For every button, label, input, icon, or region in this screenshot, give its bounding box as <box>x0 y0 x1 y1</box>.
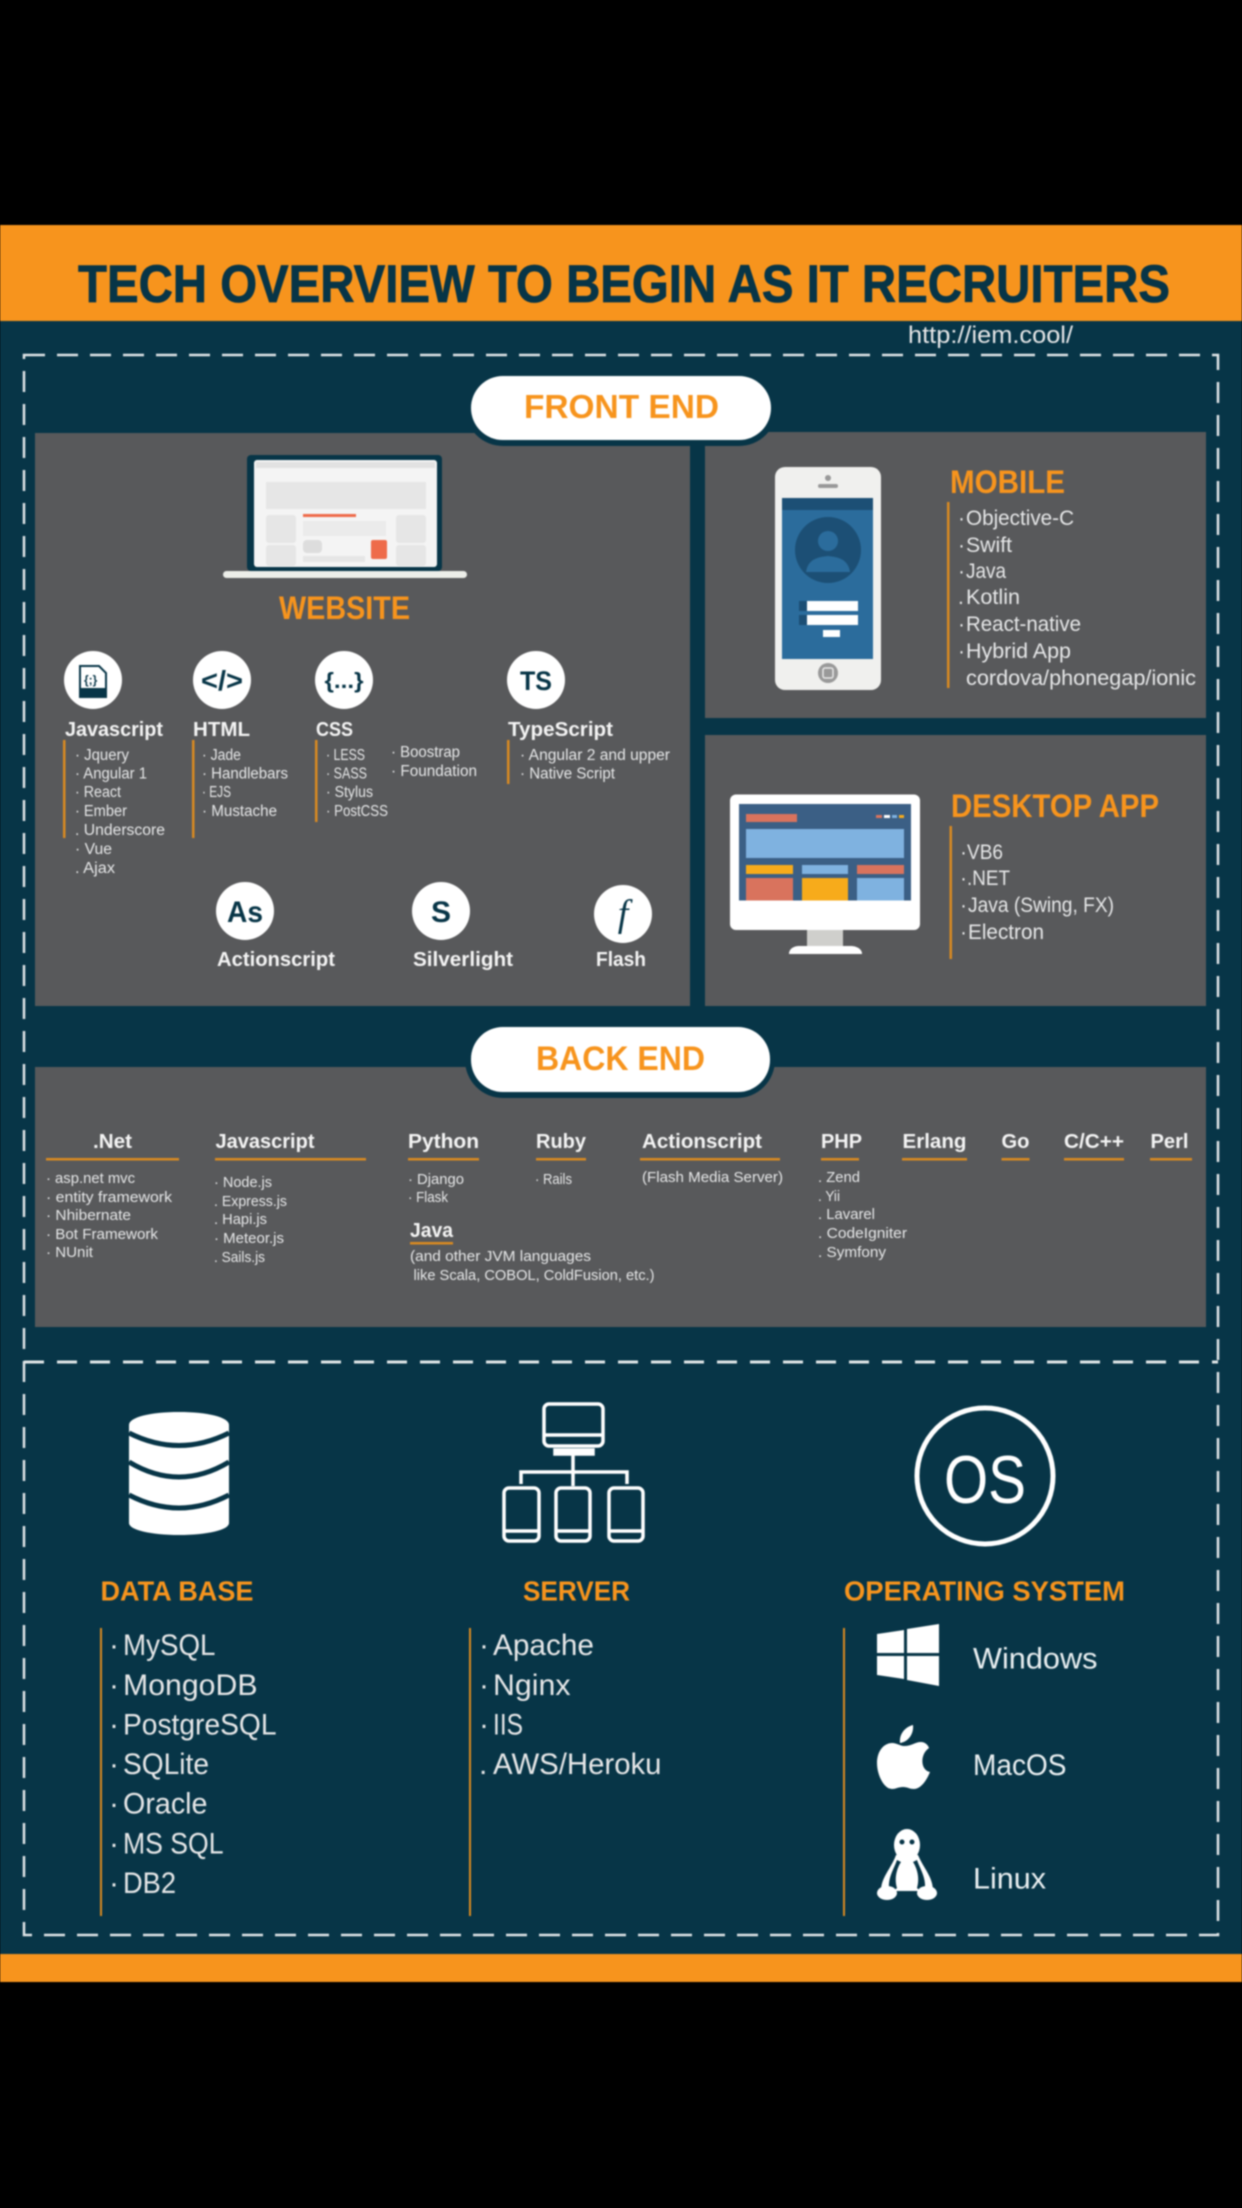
list: css: · PostCSS <box>326 803 388 820</box>
icon: windows <box>877 1624 939 1686</box>
column: perl: Perl <box>1150 1131 1188 1153</box>
list: databases: · <box>109 1629 119 1662</box>
pill heading: front end: FRONT END <box>524 388 719 425</box>
column: python and java: like Scala, COBOL, ColdFusion, etc.) <box>414 1267 654 1284</box>
label: html: HTML <box>193 719 250 741</box>
list: mobile: · <box>958 560 965 583</box>
column: .net: · Bot Framework <box>46 1226 158 1243</box>
heading: data base: DATA BASE <box>100 1576 254 1606</box>
list: databases: MySQL <box>123 1629 216 1662</box>
list: mobile: Hybrid App <box>966 640 1071 663</box>
icon: html tag: </> <box>201 665 243 696</box>
list: typescript: · Native Script <box>520 766 616 782</box>
icon: os circle <box>917 1408 1053 1544</box>
icon: database cylinder <box>129 1412 229 1535</box>
list: mobile: cordova/phonegap/ionic <box>966 667 1196 690</box>
column: .net: · asp.net mvc <box>46 1170 135 1187</box>
list: servers: Apache <box>493 1629 594 1662</box>
html group <box>192 651 288 838</box>
list: desktop app: · <box>960 894 967 917</box>
list: databases: · <box>109 1748 119 1781</box>
column: python and java: Python <box>408 1131 479 1153</box>
list: servers: IIS <box>493 1708 523 1742</box>
list: desktop app: · <box>960 921 967 944</box>
list: html: · Handlebars <box>202 766 288 782</box>
heading: mobile: MOBILE <box>950 464 1065 500</box>
list: databases: · <box>109 1788 119 1820</box>
pill heading: back end <box>465 1021 775 1098</box>
column: javascript: . Express.js <box>214 1193 287 1210</box>
list: html: · Jade <box>202 747 241 764</box>
column: python and java: (and other JVM languages <box>410 1248 591 1265</box>
list: mobile: Swift <box>966 534 1012 557</box>
silverlight group: S <box>431 896 451 929</box>
flash group <box>594 885 652 971</box>
column: actionscript <box>640 1131 783 1186</box>
column: .net: · NUnit <box>46 1244 94 1261</box>
list: typescript <box>520 747 670 782</box>
icon: css braces <box>315 651 373 709</box>
flash group: Flash <box>596 949 646 971</box>
label: css: CSS <box>316 719 353 741</box>
column: actionscript: (Flash Media Server) <box>642 1169 783 1186</box>
source url: http://iem.cool/ <box>908 322 1073 349</box>
flash group: f <box>618 893 633 935</box>
list: databases: SQLite <box>123 1748 209 1781</box>
list: servers: · <box>479 1629 489 1662</box>
list: databases: · <box>109 1828 119 1860</box>
column: ruby: Ruby <box>536 1131 587 1153</box>
column: python and java: Java <box>410 1220 454 1242</box>
column: php <box>818 1131 907 1261</box>
panel: desktop app <box>705 735 1206 1006</box>
list: mobile: · <box>958 640 965 663</box>
column: php: . Lavarel <box>818 1206 875 1223</box>
column: javascript: Javascript <box>216 1131 315 1153</box>
section: operating system <box>843 1408 1125 1916</box>
section: data base <box>100 1412 276 1916</box>
column: javascript: . Sails.js <box>214 1249 265 1266</box>
icon: linux penguin <box>877 1829 937 1900</box>
list: mobile: · <box>958 534 965 557</box>
list: servers: AWS/Heroku <box>493 1748 662 1781</box>
label: typescript: TypeScript <box>508 719 613 741</box>
pill heading: front end <box>465 370 777 446</box>
list: mobile: · <box>958 507 965 530</box>
javascript group <box>63 651 165 877</box>
list: javascript: . Ajax <box>75 860 115 877</box>
actionscript group: Actionscript <box>217 949 335 971</box>
list: servers <box>479 1629 662 1781</box>
column: python and java <box>408 1131 654 1284</box>
list: desktop app: VB6 <box>967 841 1003 864</box>
column: python and java: · Flask <box>408 1189 448 1206</box>
heading: server: SERVER <box>523 1576 630 1606</box>
column: python and java: · Django <box>408 1171 464 1188</box>
list: servers: Nginx <box>493 1669 570 1702</box>
icon: css braces: {...} <box>324 668 364 693</box>
css group <box>315 651 477 822</box>
list: mobile: Kotlin <box>966 586 1020 609</box>
icon: laptop <box>223 455 467 578</box>
header banner <box>0 225 1242 321</box>
column: .net: · Nhibernate <box>46 1207 131 1224</box>
list: javascript: · Vue <box>75 841 112 858</box>
list: mobile: Java <box>966 560 1006 583</box>
list: databases: DB2 <box>123 1867 176 1900</box>
list: desktop app: · <box>960 867 967 890</box>
column: javascript: . Hapi.js <box>214 1211 267 1228</box>
column: javascript: · Meteor.js <box>214 1230 284 1247</box>
column: c/c++: C/C++ <box>1064 1131 1124 1153</box>
list: servers: · <box>479 1708 489 1742</box>
dashed section divider <box>24 1360 1218 1364</box>
column: php: . CodeIgniter <box>818 1225 907 1242</box>
list: mobile: React-native <box>966 613 1081 636</box>
list: desktop app: Electron <box>968 921 1044 944</box>
heading: desktop app: DESKTOP APP <box>951 788 1159 824</box>
column: php: . Yii <box>818 1188 840 1205</box>
column: go: Go <box>1002 1131 1030 1153</box>
icon: server network <box>504 1404 643 1541</box>
list: databases: Oracle <box>123 1788 208 1820</box>
label: windows: Windows <box>973 1642 1098 1676</box>
icon: javascript file <box>64 651 122 709</box>
icon: typescript: TS <box>520 666 552 696</box>
silverlight group <box>412 882 513 971</box>
silverlight group: Silverlight <box>413 949 513 971</box>
column: erlang: Erlang <box>902 1131 966 1153</box>
list: html: · Mustache <box>202 803 277 820</box>
list: javascript: · Jquery <box>75 747 129 764</box>
list: databases <box>109 1629 276 1900</box>
list: databases: · <box>109 1867 119 1900</box>
footer bar <box>0 1954 1242 1982</box>
list: css: · SASS <box>326 766 367 782</box>
list: desktop app: .NET <box>967 867 1010 890</box>
list: javascript: · Angular 1 <box>75 766 147 782</box>
label: macos: MacOS <box>973 1749 1066 1782</box>
list: css: · Foundation <box>391 763 477 780</box>
heading: website: WEBSITE <box>279 590 410 626</box>
list: databases: MongoDB <box>123 1669 258 1702</box>
column: actionscript: Actionscript <box>642 1131 762 1153</box>
list: databases: · <box>109 1669 119 1702</box>
list: css: · Boostrap <box>391 744 460 761</box>
list: desktop app <box>960 841 1114 944</box>
list: html: · EJS <box>202 784 231 801</box>
actionscript group: As <box>227 896 263 929</box>
column: ruby: · Rails <box>535 1171 572 1188</box>
column: php: PHP <box>821 1131 862 1153</box>
list: mobile: · <box>958 613 965 636</box>
list: desktop app: · <box>960 841 967 864</box>
list: desktop app: Java (Swing, FX) <box>968 894 1114 917</box>
list: databases: PostgreSQL <box>123 1708 276 1742</box>
section: server <box>469 1404 662 1916</box>
column: .net: · entity framework <box>46 1189 173 1206</box>
column: .net: .Net <box>93 1131 132 1153</box>
panel: back end <box>35 1067 1206 1327</box>
list: html <box>202 747 288 820</box>
pill heading: back end: BACK END <box>536 1040 705 1078</box>
typescript group <box>507 651 670 784</box>
list: servers: · <box>479 1669 489 1702</box>
panel: mobile <box>705 432 1206 718</box>
dashed outer frame <box>24 355 1218 1935</box>
actionscript group <box>216 882 335 971</box>
column: javascript: · Node.js <box>214 1174 272 1191</box>
icon: desktop monitor <box>730 794 920 954</box>
list: css: · LESS <box>326 747 365 764</box>
icon: typescript <box>507 651 565 709</box>
icon: phone <box>775 467 881 690</box>
list: databases: · <box>109 1708 119 1742</box>
list: databases: MS SQL <box>123 1828 224 1860</box>
panel: website <box>35 433 690 1006</box>
heading: operating system: OPERATING SYSTEM <box>844 1576 1125 1606</box>
list: css: · Stylus <box>326 784 373 801</box>
column: perl <box>1150 1131 1192 1160</box>
list: mobile: . <box>958 586 964 609</box>
column: .net <box>46 1131 179 1261</box>
column: php: . Zend <box>818 1169 860 1186</box>
column: javascript <box>214 1131 366 1266</box>
list: javascript: . Underscore <box>75 822 165 839</box>
icon: apple <box>877 1725 930 1789</box>
list: servers: . <box>479 1748 487 1781</box>
column: ruby <box>535 1131 587 1188</box>
list: mobile <box>958 507 1196 690</box>
label: javascript: Javascript <box>65 719 163 741</box>
list: javascript <box>75 747 165 877</box>
list: javascript: · React <box>75 784 122 801</box>
list: typescript: · Angular 2 and upper <box>520 747 670 764</box>
icon: html tag <box>193 651 251 709</box>
column: php: . Symfony <box>818 1244 887 1261</box>
list: mobile: Objective-C <box>966 507 1074 530</box>
list: css <box>326 744 477 820</box>
icon: os circle: OS <box>944 1442 1026 1518</box>
list: javascript: · Ember <box>75 803 127 820</box>
icon: javascript file: {;} <box>84 673 98 687</box>
label: linux: Linux <box>973 1862 1046 1896</box>
